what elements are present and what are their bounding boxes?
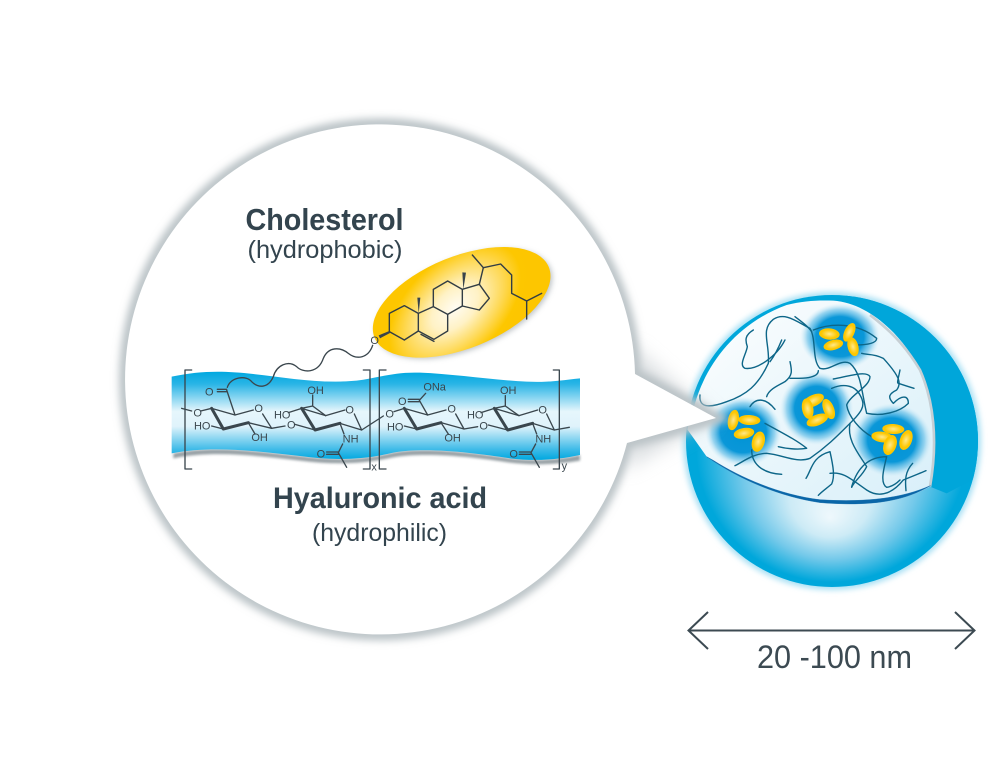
sugar rings unit x	[182, 389, 383, 467]
sugar rings unit y	[394, 393, 569, 467]
infographic	[114, 114, 984, 668]
chemical labels: OH	[307, 385, 324, 397]
cut face	[687, 300, 934, 503]
size label: 20 -100 nm	[757, 639, 912, 675]
size arrow	[688, 612, 974, 649]
chemical labels: O	[193, 408, 202, 420]
chemical labels: HO	[387, 421, 404, 433]
sublabel: hydrophobic: (hydrophobic)	[248, 236, 402, 264]
chemical labels: NH	[535, 434, 551, 446]
bubble body	[125, 124, 716, 634]
drug cluster centre	[801, 391, 837, 429]
steroid skeleton	[379, 255, 542, 341]
chemical labels: O	[398, 396, 407, 408]
hydrophobic domains	[705, 303, 932, 477]
sublabel: hydrophilic: (hydrophilic)	[312, 519, 447, 547]
chemical labels: HO	[194, 421, 211, 433]
chemical labels: O	[385, 409, 394, 421]
bubble shadow	[125, 124, 716, 634]
linker chain	[227, 345, 373, 387]
repeat brackets	[185, 370, 559, 469]
chemical labels	[193, 382, 568, 474]
ribbon shadow	[173, 449, 580, 464]
chemical labels: O	[254, 403, 263, 415]
tail shadow	[625, 345, 716, 470]
nanoparticle sphere	[683, 287, 997, 590]
back shell crescent	[846, 296, 978, 494]
chemical labels: NH	[343, 433, 359, 445]
drug cluster right	[871, 424, 915, 456]
chemical labels: HO	[467, 410, 484, 422]
sphere body	[686, 295, 978, 587]
chemical labels: OH	[251, 432, 268, 444]
heading: hyaluronic acid: Hyaluronic acid	[273, 482, 487, 515]
drug cluster top	[819, 322, 860, 357]
chemical labels: ONa	[423, 382, 447, 394]
chemical labels: O	[287, 420, 296, 432]
chemical labels: HO	[274, 409, 291, 421]
hyaluronic acid ribbon	[172, 345, 580, 474]
face rim	[707, 457, 931, 504]
chemical labels: O	[345, 404, 354, 416]
chemical labels: O	[205, 387, 214, 399]
face right edge	[870, 315, 934, 487]
chemical labels: y	[562, 460, 568, 472]
chemical labels: O	[447, 404, 456, 416]
ellipse shadow	[360, 227, 568, 381]
cholesterol ellipse	[357, 224, 568, 381]
chemical labels: O	[317, 448, 326, 460]
drug cluster left	[726, 409, 767, 453]
chemical labels: x	[371, 462, 377, 474]
polymer strands	[700, 317, 926, 495]
sphere halo	[683, 292, 981, 590]
callout bubble	[125, 124, 716, 634]
chemical labels: OH	[444, 433, 461, 445]
chemical labels: O	[538, 404, 547, 416]
chemical labels: OH	[500, 385, 517, 397]
ester oxygen: O	[370, 335, 379, 347]
chemical labels: O	[509, 449, 518, 461]
chemical labels: O	[479, 420, 488, 432]
yellow ellipse	[357, 224, 566, 380]
heading: cholesterol: Cholesterol	[246, 202, 404, 237]
ribbon band	[172, 372, 580, 460]
